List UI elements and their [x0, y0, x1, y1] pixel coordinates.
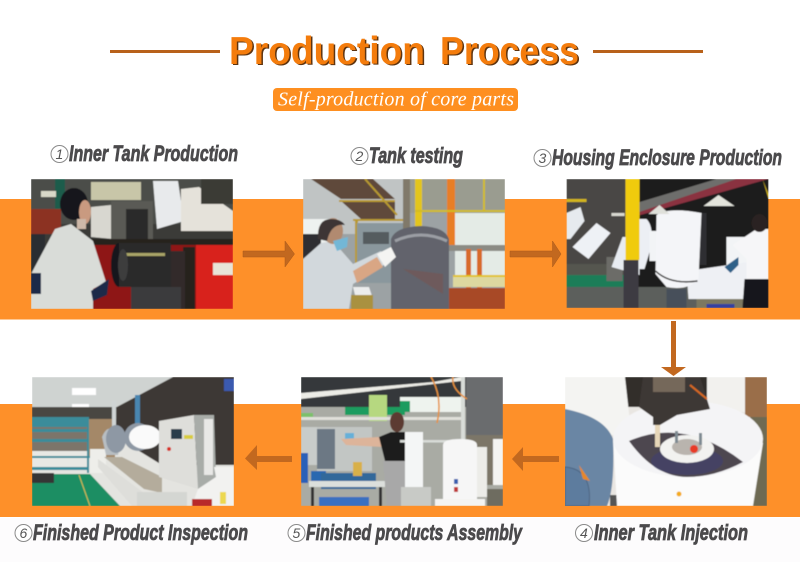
title: Production: [230, 31, 426, 74]
arrow: step 1 to 2: [243, 241, 294, 267]
title: [110, 30, 703, 74]
step label 1: 1: [56, 146, 63, 162]
step label 4: 4: [580, 525, 588, 541]
step label 4: [576, 520, 748, 545]
photo 4: inner tank injection: [565, 377, 767, 506]
photo 6: finished product inspection: [32, 377, 234, 506]
photo 5: finished products assembly: [301, 377, 503, 506]
step label 6: [15, 520, 248, 545]
arrow: step 2 to 3: [510, 241, 561, 267]
step label 5: 5: [292, 525, 300, 541]
step label 2: 2: [354, 148, 364, 164]
step label 4: Inner Tank Injection: [594, 520, 748, 545]
subtitle pill: Self-production of core parts: [278, 88, 514, 110]
step label 2: [351, 143, 463, 168]
arrow: step 4 to 5: [512, 447, 559, 471]
title: Process: [442, 31, 580, 74]
step label 1: Inner Tank Production: [69, 141, 238, 166]
step label 1: [51, 141, 238, 166]
title: Production: [229, 30, 425, 73]
orange band: bottom row: [0, 404, 800, 517]
arrow: step 3 to 4: [661, 321, 686, 376]
arrow: step 5 to 6: [245, 445, 292, 470]
step label 2: Tank testing: [369, 143, 463, 168]
step label 6: Finished Product Inspection: [33, 520, 248, 545]
photo 1: inner tank production: [31, 179, 233, 309]
step label 3: 3: [538, 150, 546, 166]
step label 5: [288, 520, 523, 545]
step label 5: Finished products Assembly: [306, 520, 523, 545]
photo 3: housing enclosure production: [566, 179, 768, 308]
photo 2: tank testing: [303, 179, 505, 309]
orange band: top row: [0, 199, 800, 320]
title: Process: [440, 30, 579, 73]
step label 6: 6: [20, 525, 28, 541]
